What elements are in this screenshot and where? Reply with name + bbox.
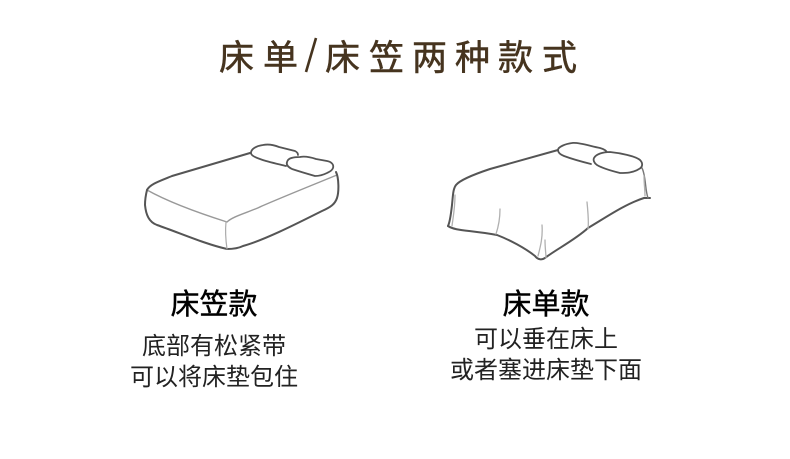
text: fitted sheet description: 底部有松紧带	[142, 333, 286, 360]
title: 床笠两种款式	[325, 39, 577, 78]
title: 床单	[219, 39, 298, 78]
text: flat sheet description	[450, 326, 642, 384]
text: flat sheet description: 可以垂在床上	[474, 326, 618, 353]
text: fitted sheet description	[130, 333, 298, 391]
text: fitted sheet description: 可以将床垫包住	[130, 364, 298, 391]
heading: flat sheet: 床单款	[502, 289, 590, 321]
heading: fitted sheet: 床笠款	[170, 289, 258, 321]
text: flat sheet description: 或者塞进床垫下面	[450, 357, 642, 384]
